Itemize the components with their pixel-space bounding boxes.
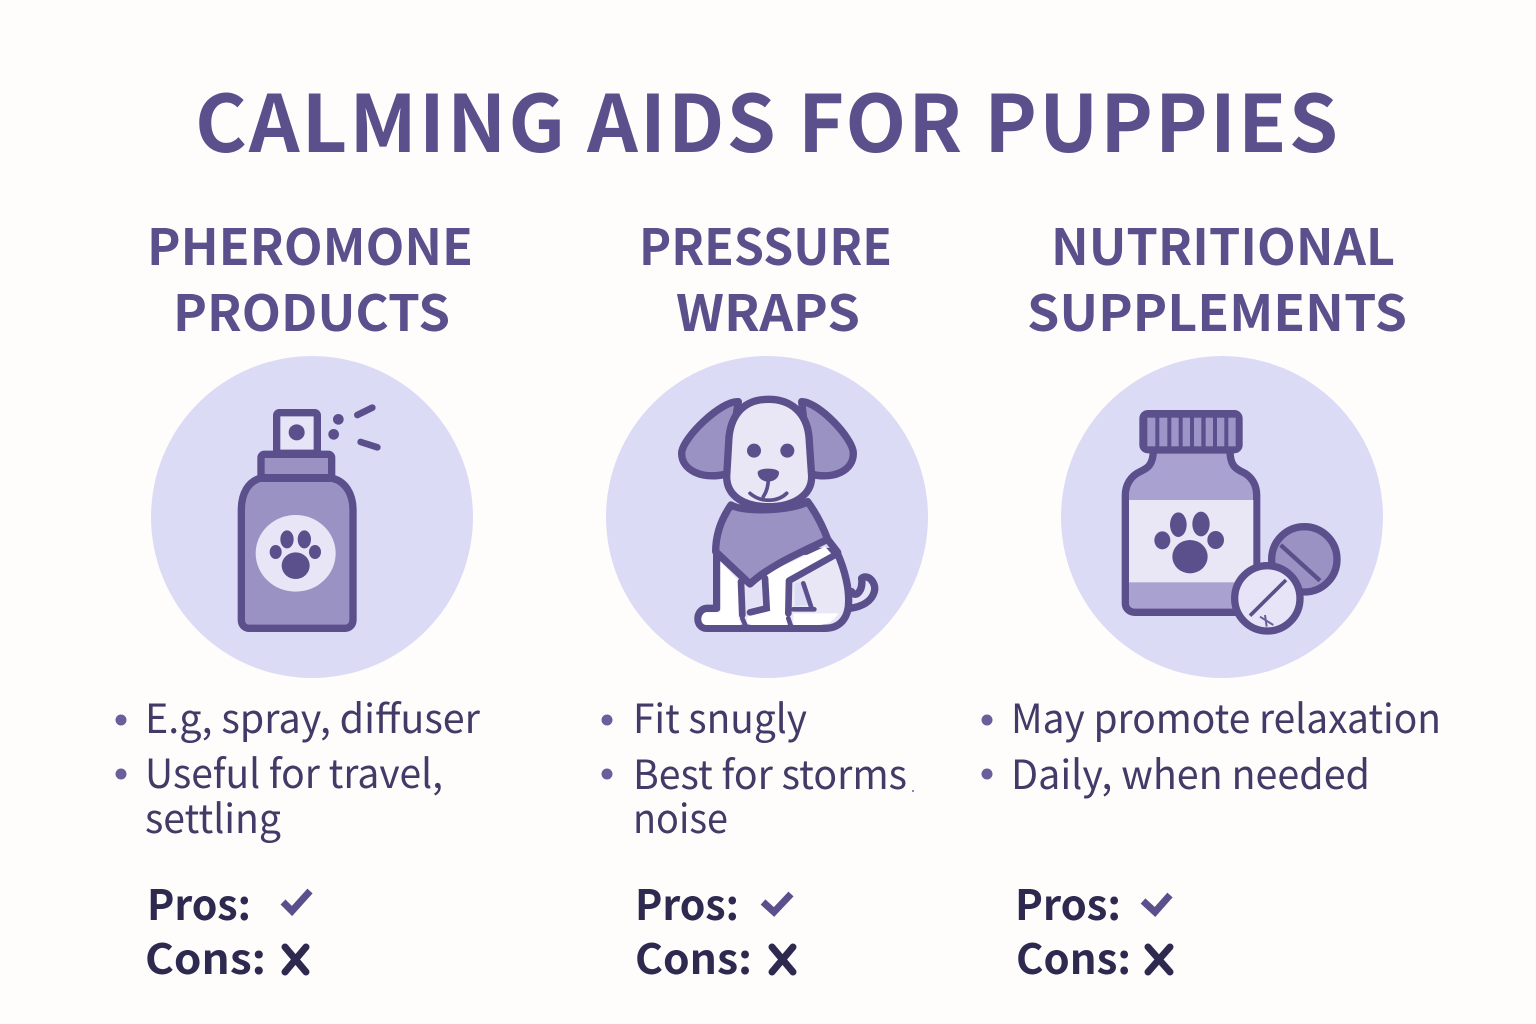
heading: nutritional supplements bbox=[1027, 208, 1407, 346]
bullet list: pressure wraps: Best for storms bbox=[633, 743, 907, 801]
heading: nutritional supplements: NUTRITIONAL bbox=[1051, 208, 1395, 280]
bullet list: pheromone products bbox=[116, 687, 480, 845]
head bbox=[727, 399, 812, 507]
icon: spray bottle bbox=[151, 356, 473, 678]
heading: pheromone products: PHEROMONE bbox=[147, 208, 473, 280]
panel: pheromone products bbox=[116, 208, 480, 987]
bullet list: pheromone products: Useful for travel, bbox=[145, 742, 443, 800]
panel: pressure wraps bbox=[602, 208, 928, 987]
pros and cons: pressure wraps bbox=[635, 872, 793, 987]
pros and cons: pheromone products: Pros: bbox=[147, 872, 251, 933]
heading: nutritional supplements: SUPPLEMENTS bbox=[1027, 274, 1407, 346]
panel: nutritional supplements bbox=[982, 208, 1441, 987]
bullet list: nutritional supplements: Daily, when needed bbox=[1011, 743, 1370, 801]
wrap bbox=[716, 502, 838, 584]
icon: supplement bottle and tablets bbox=[1061, 356, 1383, 678]
bullet list: pressure wraps: Fit snugly bbox=[633, 687, 807, 745]
bullet list: nutritional supplements: May promote relaxation bbox=[1011, 687, 1441, 745]
bullet list: pheromone products: settling bbox=[145, 787, 281, 845]
heading: pheromone products bbox=[147, 208, 473, 346]
heading: pressure wraps bbox=[639, 208, 892, 346]
pros and cons: nutritional supplements bbox=[1015, 872, 1170, 987]
bullet list: pressure wraps: noise bbox=[633, 787, 728, 845]
heading: pressure wraps: PRESSURE bbox=[639, 208, 892, 280]
pros and cons: pressure wraps: Pros: bbox=[635, 872, 739, 933]
bullet list: pressure wraps bbox=[602, 687, 914, 845]
ears bbox=[682, 402, 853, 476]
tail bbox=[850, 577, 875, 608]
title: CALMING AIDS FOR PUPPIES bbox=[195, 60, 1338, 175]
pros and cons: nutritional supplements: Pros: bbox=[1015, 872, 1121, 933]
pros and cons: pheromone products: Cons: bbox=[145, 926, 266, 987]
pros and cons: nutritional supplements: Cons: bbox=[1016, 926, 1131, 987]
icon: puppy in wrap bbox=[606, 356, 928, 678]
bullet list: pheromone products: E.g, spray, diffuser bbox=[145, 687, 480, 745]
heading: pressure wraps: WRAPS bbox=[676, 274, 860, 346]
pros and cons: pressure wraps: Cons: bbox=[635, 926, 752, 987]
pros and cons: pheromone products bbox=[145, 872, 310, 987]
heading: pheromone products: PRODUCTS bbox=[173, 274, 450, 346]
bullet list: nutritional supplements bbox=[982, 687, 1441, 801]
body and legs bbox=[698, 547, 849, 628]
